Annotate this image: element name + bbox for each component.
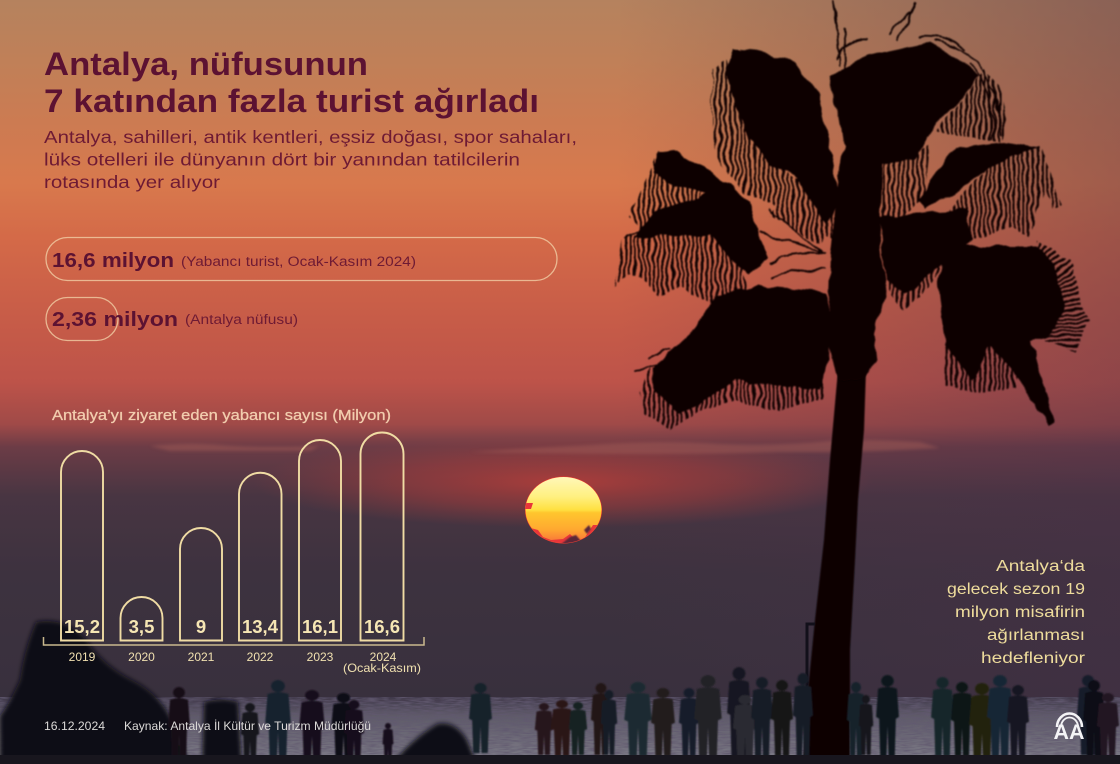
bar chart: 2022 xyxy=(247,650,274,664)
bar chart: 16,1 xyxy=(302,616,338,637)
bar chart: 2019 xyxy=(69,650,96,664)
palm frond: mid left xyxy=(635,150,768,275)
callout: next season target: gelecek sezon 19 xyxy=(947,581,1085,598)
stat: foreign tourists: (Yabancı turist, Ocak-Kasım 2024) xyxy=(181,254,416,269)
palm tree silhouette xyxy=(600,0,1100,425)
bar chart: 3,5 xyxy=(129,616,154,637)
chart title: Antalya’yı ziyaret eden yabancı sayısı (Milyon) xyxy=(52,407,391,424)
stat: foreign tourists xyxy=(46,238,557,280)
callout: next season target: ağırlanması xyxy=(987,627,1085,644)
crowd silhouettes xyxy=(168,667,1119,764)
bar chart xyxy=(44,432,424,675)
stat: Antalya population: (Antalya nüfusu) xyxy=(185,312,298,327)
palm upper trunk and crown core xyxy=(827,120,886,380)
bar chart: (Ocak-Kasım) xyxy=(343,661,421,675)
stat: Antalya population xyxy=(46,298,298,340)
icon: AA logo: AA xyxy=(1054,721,1084,744)
callout: next season target: hedefleniyor xyxy=(981,650,1085,667)
intro text: Antalya, sahilleri, antik kentleri, eşsiz doğası, spor sahaları, xyxy=(44,127,577,147)
stat: Antalya population: 2,36 milyon xyxy=(52,309,178,331)
title xyxy=(44,46,539,119)
footer: date and source: Kaynak: Antalya İl Kültür ve Turizm Müdürlüğü xyxy=(124,719,371,733)
bar chart: 2021 xyxy=(188,650,215,664)
bar chart: 2023 xyxy=(307,650,334,664)
palm frond: lower right fan xyxy=(938,246,1065,425)
palm frond: lower left xyxy=(652,286,830,415)
palm frond: lower centre right xyxy=(880,209,973,295)
ground strip xyxy=(0,755,1120,764)
blurred foreground silhouettes xyxy=(0,621,477,764)
title: Antalya, nüfusunun xyxy=(44,46,368,82)
bar chart: 13,4 xyxy=(242,616,279,637)
bar chart: 15,2 xyxy=(64,616,100,637)
bar chart: 9 xyxy=(196,616,206,637)
callout: next season target: Antalya‘da xyxy=(996,558,1085,575)
footer: date and source: 16.12.2024 xyxy=(44,719,105,733)
bar chart: 16,6 xyxy=(364,616,400,637)
palm frond individual strands xyxy=(624,0,1002,369)
sea xyxy=(0,697,1120,757)
palm frond hanging fringes xyxy=(614,59,1062,430)
intro text: lüks otelleri ile dünyanın dört bir yanından tatilcilerin xyxy=(44,150,520,170)
palm tree trunk xyxy=(803,370,866,764)
palm frond radial fan fringe xyxy=(1020,250,1074,360)
stat: foreign tourists: 16,6 milyon xyxy=(52,250,174,272)
palm frond: top left xyxy=(725,50,840,225)
intro text xyxy=(44,127,577,192)
callout: next season target: milyon misafirin xyxy=(955,604,1085,621)
intro text: rotasında yer alıyor xyxy=(44,172,220,192)
sun xyxy=(525,476,602,544)
callout: next season target xyxy=(947,558,1085,667)
title: 7 katından fazla turist ağırladı xyxy=(44,83,539,119)
bar chart: 2024 xyxy=(370,650,397,664)
palm frond: mid right xyxy=(918,142,1040,210)
bar chart: 2020 xyxy=(128,650,155,664)
street pole xyxy=(807,624,815,704)
palm frond: top right xyxy=(830,42,978,165)
